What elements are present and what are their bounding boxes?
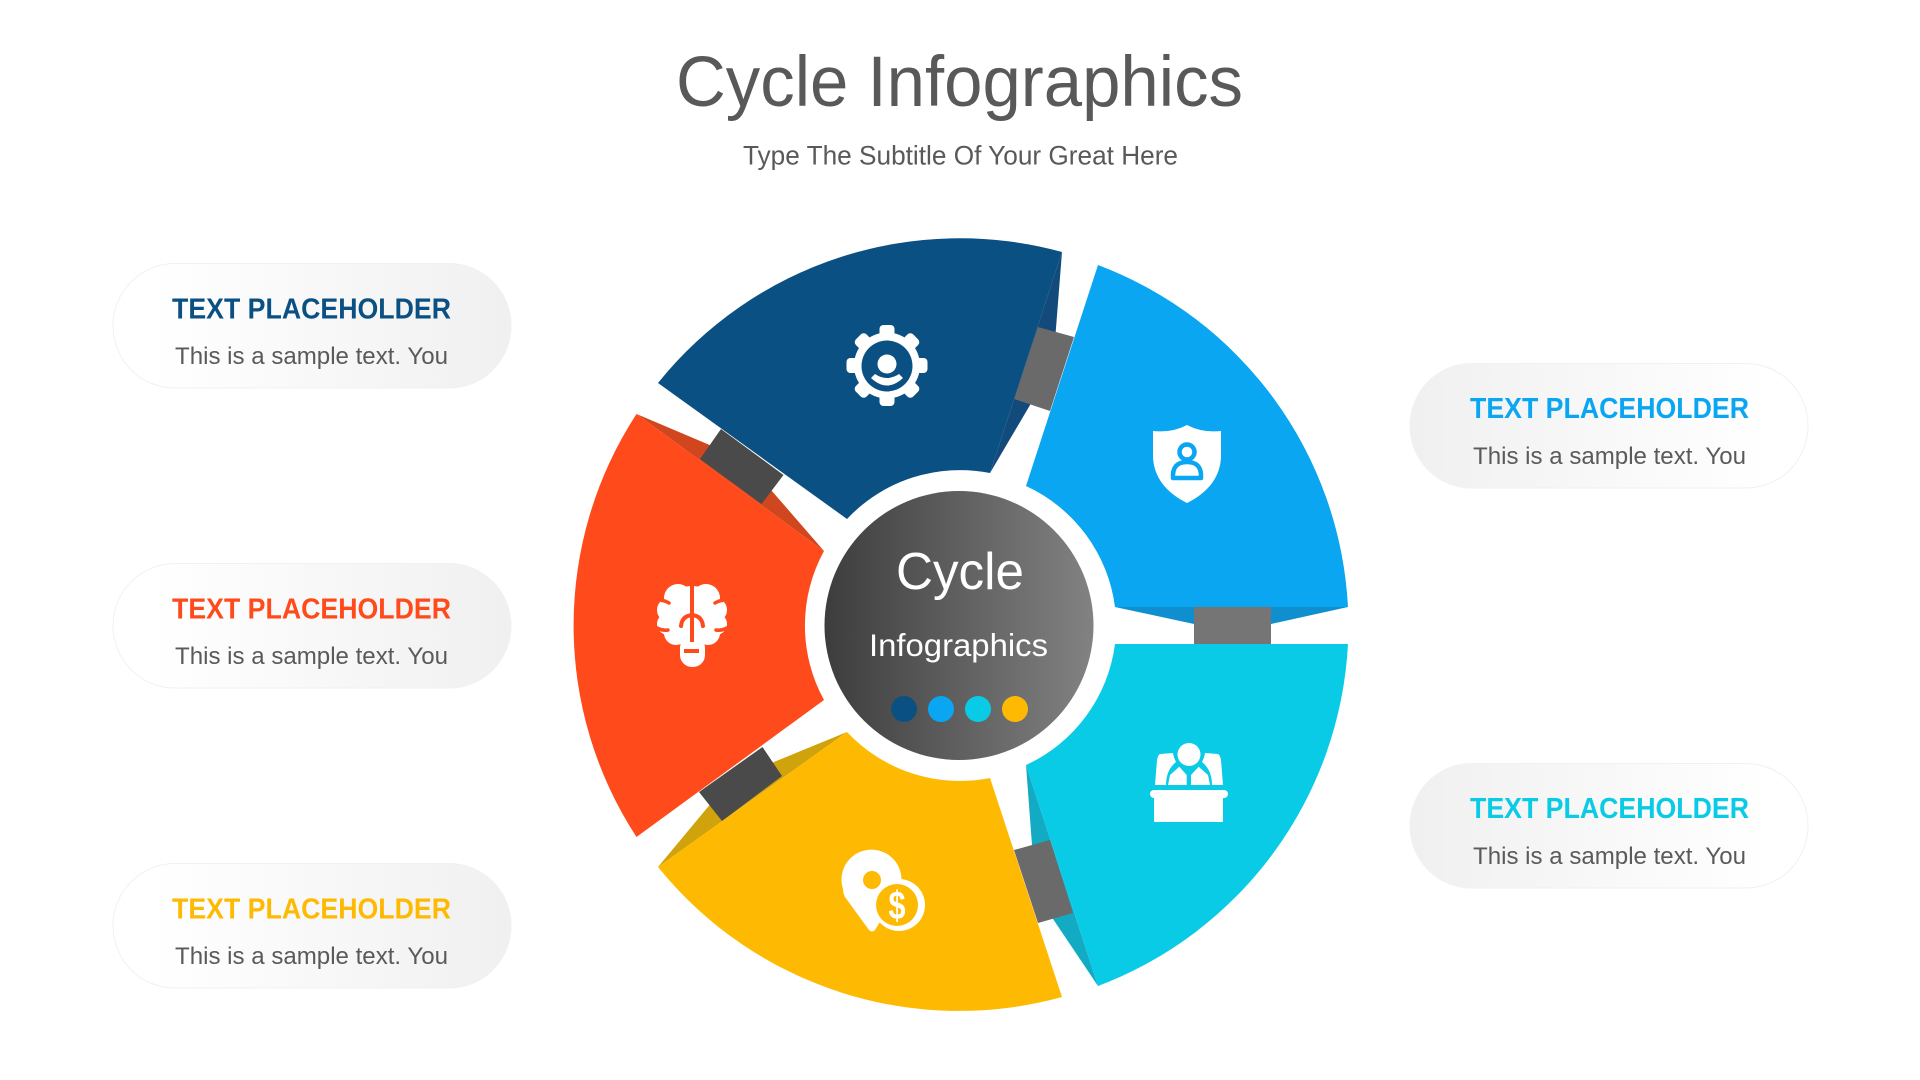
- legend dots: [891, 696, 1028, 722]
- center label: Infographics: Infographics: [869, 627, 1048, 663]
- yellow pill body: This is a sample text. You: [175, 943, 448, 970]
- center label: Cycle: Cycle: [896, 543, 1024, 601]
- connector: navy to blue: [1014, 327, 1074, 411]
- panel: red text pill: [113, 564, 511, 688]
- panel: yellow text pill: [113, 864, 511, 988]
- panel: cyan text pill: [1410, 764, 1808, 888]
- yellow pill heading: TEXT PLACEHOLDER: [172, 894, 451, 926]
- subtitle: Type The Subtitle Of Your Great Here: [743, 140, 1178, 170]
- navy fold shadow: [990, 252, 1062, 473]
- red fold shadow: [636, 414, 824, 551]
- icon: gear with person: [846, 325, 928, 406]
- connector: cyan to yellow: [1014, 840, 1073, 923]
- yellow fold shadow: [658, 732, 847, 867]
- blue pill body: This is a sample text. You: [1473, 443, 1746, 470]
- panel: navy text pill: [113, 264, 511, 388]
- title: Cycle Infographics: [676, 43, 1243, 122]
- navy pill heading: TEXT PLACEHOLDER: [172, 294, 451, 326]
- connector: yellow to red: [699, 747, 782, 821]
- cyan pill body: This is a sample text. You: [1473, 843, 1746, 870]
- segment: blue: [1026, 265, 1348, 607]
- cyan pill heading: TEXT PLACEHOLDER: [1470, 793, 1749, 825]
- panel: blue text pill: [1410, 364, 1808, 488]
- center circle: [824, 491, 1094, 760]
- icon: speaker at lectern: [1150, 743, 1228, 822]
- icon: shield with person: [1153, 425, 1221, 503]
- segment: red: [574, 414, 824, 837]
- icon: location pin with dollar: [842, 850, 925, 932]
- segment: navy: [658, 238, 1062, 519]
- connector: blue to cyan: [1194, 606, 1271, 645]
- cycle diagram: [574, 238, 1348, 1011]
- icon: location pin with dollar: $: [888, 884, 906, 928]
- navy pill body: This is a sample text. You: [175, 343, 448, 370]
- segment: yellow: [658, 732, 1062, 1011]
- blue pill heading: TEXT PLACEHOLDER: [1470, 393, 1749, 425]
- icon: brain lightbulb: [657, 584, 727, 667]
- segment: cyan: [1026, 644, 1348, 986]
- connector: red to navy: [700, 429, 784, 504]
- cyan fold shadow: [1026, 765, 1098, 986]
- blue fold shadow: [1115, 607, 1348, 624]
- red pill heading: TEXT PLACEHOLDER: [172, 594, 451, 626]
- red pill body: This is a sample text. You: [175, 643, 448, 670]
